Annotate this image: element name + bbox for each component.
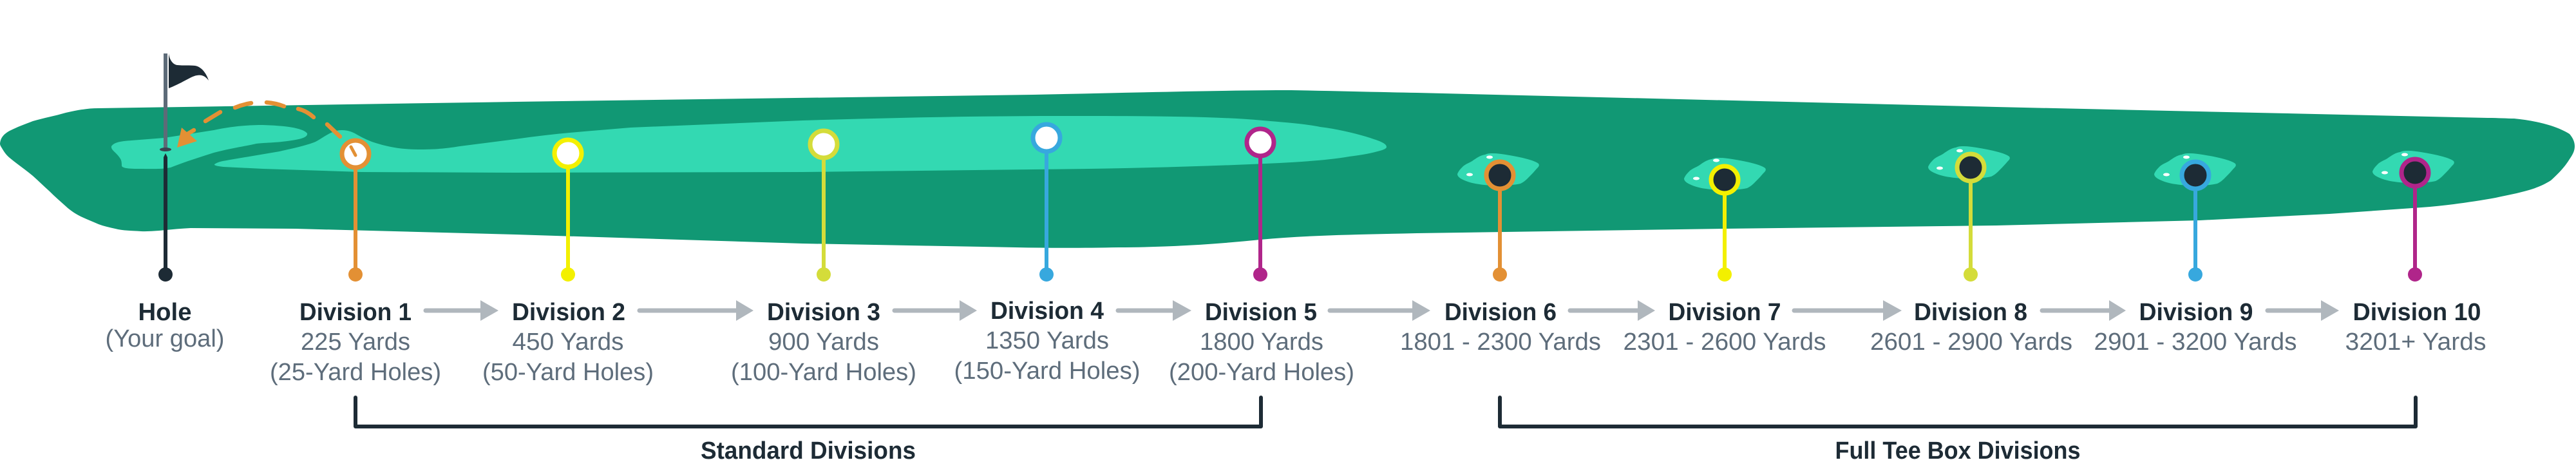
label: division 4: (150-Yard Holes) — [954, 358, 1140, 385]
label: division 2: (50-Yard Holes) — [482, 359, 654, 386]
arrow: division 3 to 4 — [893, 300, 977, 321]
pin: division 5 — [1247, 129, 1274, 282]
label: division 8: 2601 - 2900 Yards — [1870, 329, 2072, 356]
bracket: full tee box divisions — [1500, 398, 2416, 426]
arrow: division 5 to 6 — [1328, 300, 1430, 321]
pin: division 1 — [342, 140, 369, 282]
label: hole: (Your goal) — [106, 325, 224, 352]
label: division 8 — [1870, 299, 2072, 356]
label: hole: Hole — [138, 299, 192, 326]
label: division 1: Division 1 — [299, 299, 412, 326]
label: division 2 — [482, 299, 654, 386]
flag — [169, 53, 209, 88]
label: division 3: Division 3 — [767, 299, 880, 326]
pin: division 6 — [1457, 153, 1539, 282]
label: division 10: Division 10 — [2353, 299, 2481, 326]
pin: division 4 — [1033, 124, 1060, 282]
label: division 1: (25-Yard Holes) — [270, 359, 441, 386]
label: division 6: Division 6 — [1444, 299, 1557, 326]
shot arrowhead — [177, 128, 197, 148]
arrow: division 4 to 5 — [1116, 300, 1191, 321]
label: division 7: Division 7 — [1668, 299, 1781, 326]
label: division 6: 1801 - 2300 Yards — [1400, 329, 1601, 356]
label: division 5: Division 5 — [1205, 299, 1317, 326]
flag and pole — [160, 53, 209, 151]
label: division 10: 3201+ Yards — [2345, 329, 2486, 356]
label: division 5 — [1169, 299, 1354, 386]
pin: division 3 — [810, 131, 837, 282]
label: division 5: (200-Yard Holes) — [1169, 359, 1354, 386]
pin: division 2 — [554, 140, 582, 282]
label: division 3: 900 Yards — [768, 329, 879, 356]
label: division 1: 225 Yards — [301, 329, 410, 356]
arrow: division 1 to 2 — [424, 300, 498, 321]
label: division 7: 2301 - 2600 Yards — [1623, 329, 1826, 356]
flag pole — [164, 53, 167, 149]
label: division 1 — [270, 299, 441, 386]
label: division 9: Division 9 — [2139, 299, 2253, 326]
pin: division 7 — [1684, 158, 1766, 282]
pin: hole — [158, 153, 173, 282]
label: division 10 — [2345, 299, 2486, 356]
arrow: division 7 to 8 — [1792, 300, 1902, 321]
label: division 9: 2901 - 3200 Yards — [2094, 329, 2297, 356]
arrow: division 2 to 3 — [638, 300, 753, 321]
fairway — [0, 90, 2575, 248]
label: division 4 — [954, 298, 1140, 385]
arrow: division 6 to 7 — [1568, 300, 1655, 321]
hole green — [111, 125, 307, 169]
label: division 5: 1800 Yards — [1200, 329, 1323, 356]
label: division 9 — [2094, 299, 2297, 356]
label: division 8: Division 8 — [1914, 299, 2027, 326]
label: division 7 — [1623, 299, 1826, 356]
arrow: division 9 to 10 — [2266, 300, 2339, 321]
arrow: division 8 to 9 — [2040, 300, 2126, 321]
label: division 3: (100-Yard Holes) — [731, 359, 916, 386]
pin: division 9 — [2154, 153, 2236, 282]
label: division 4: 1350 Yards — [985, 327, 1109, 354]
bracket: standard divisions — [355, 398, 1261, 426]
hole cup — [160, 148, 171, 151]
label: division 2: 450 Yards — [513, 329, 623, 356]
label: division 6 — [1400, 299, 1601, 356]
pin: division 10 — [2372, 151, 2454, 282]
pin: division 8 — [1928, 146, 2010, 282]
dashed shot arc — [187, 102, 340, 137]
label: division 4: Division 4 — [990, 298, 1104, 325]
main light green strip — [214, 116, 1387, 173]
label: division 2: Division 2 — [512, 299, 625, 326]
label: hole — [106, 299, 224, 352]
label: division 3 — [731, 299, 916, 386]
